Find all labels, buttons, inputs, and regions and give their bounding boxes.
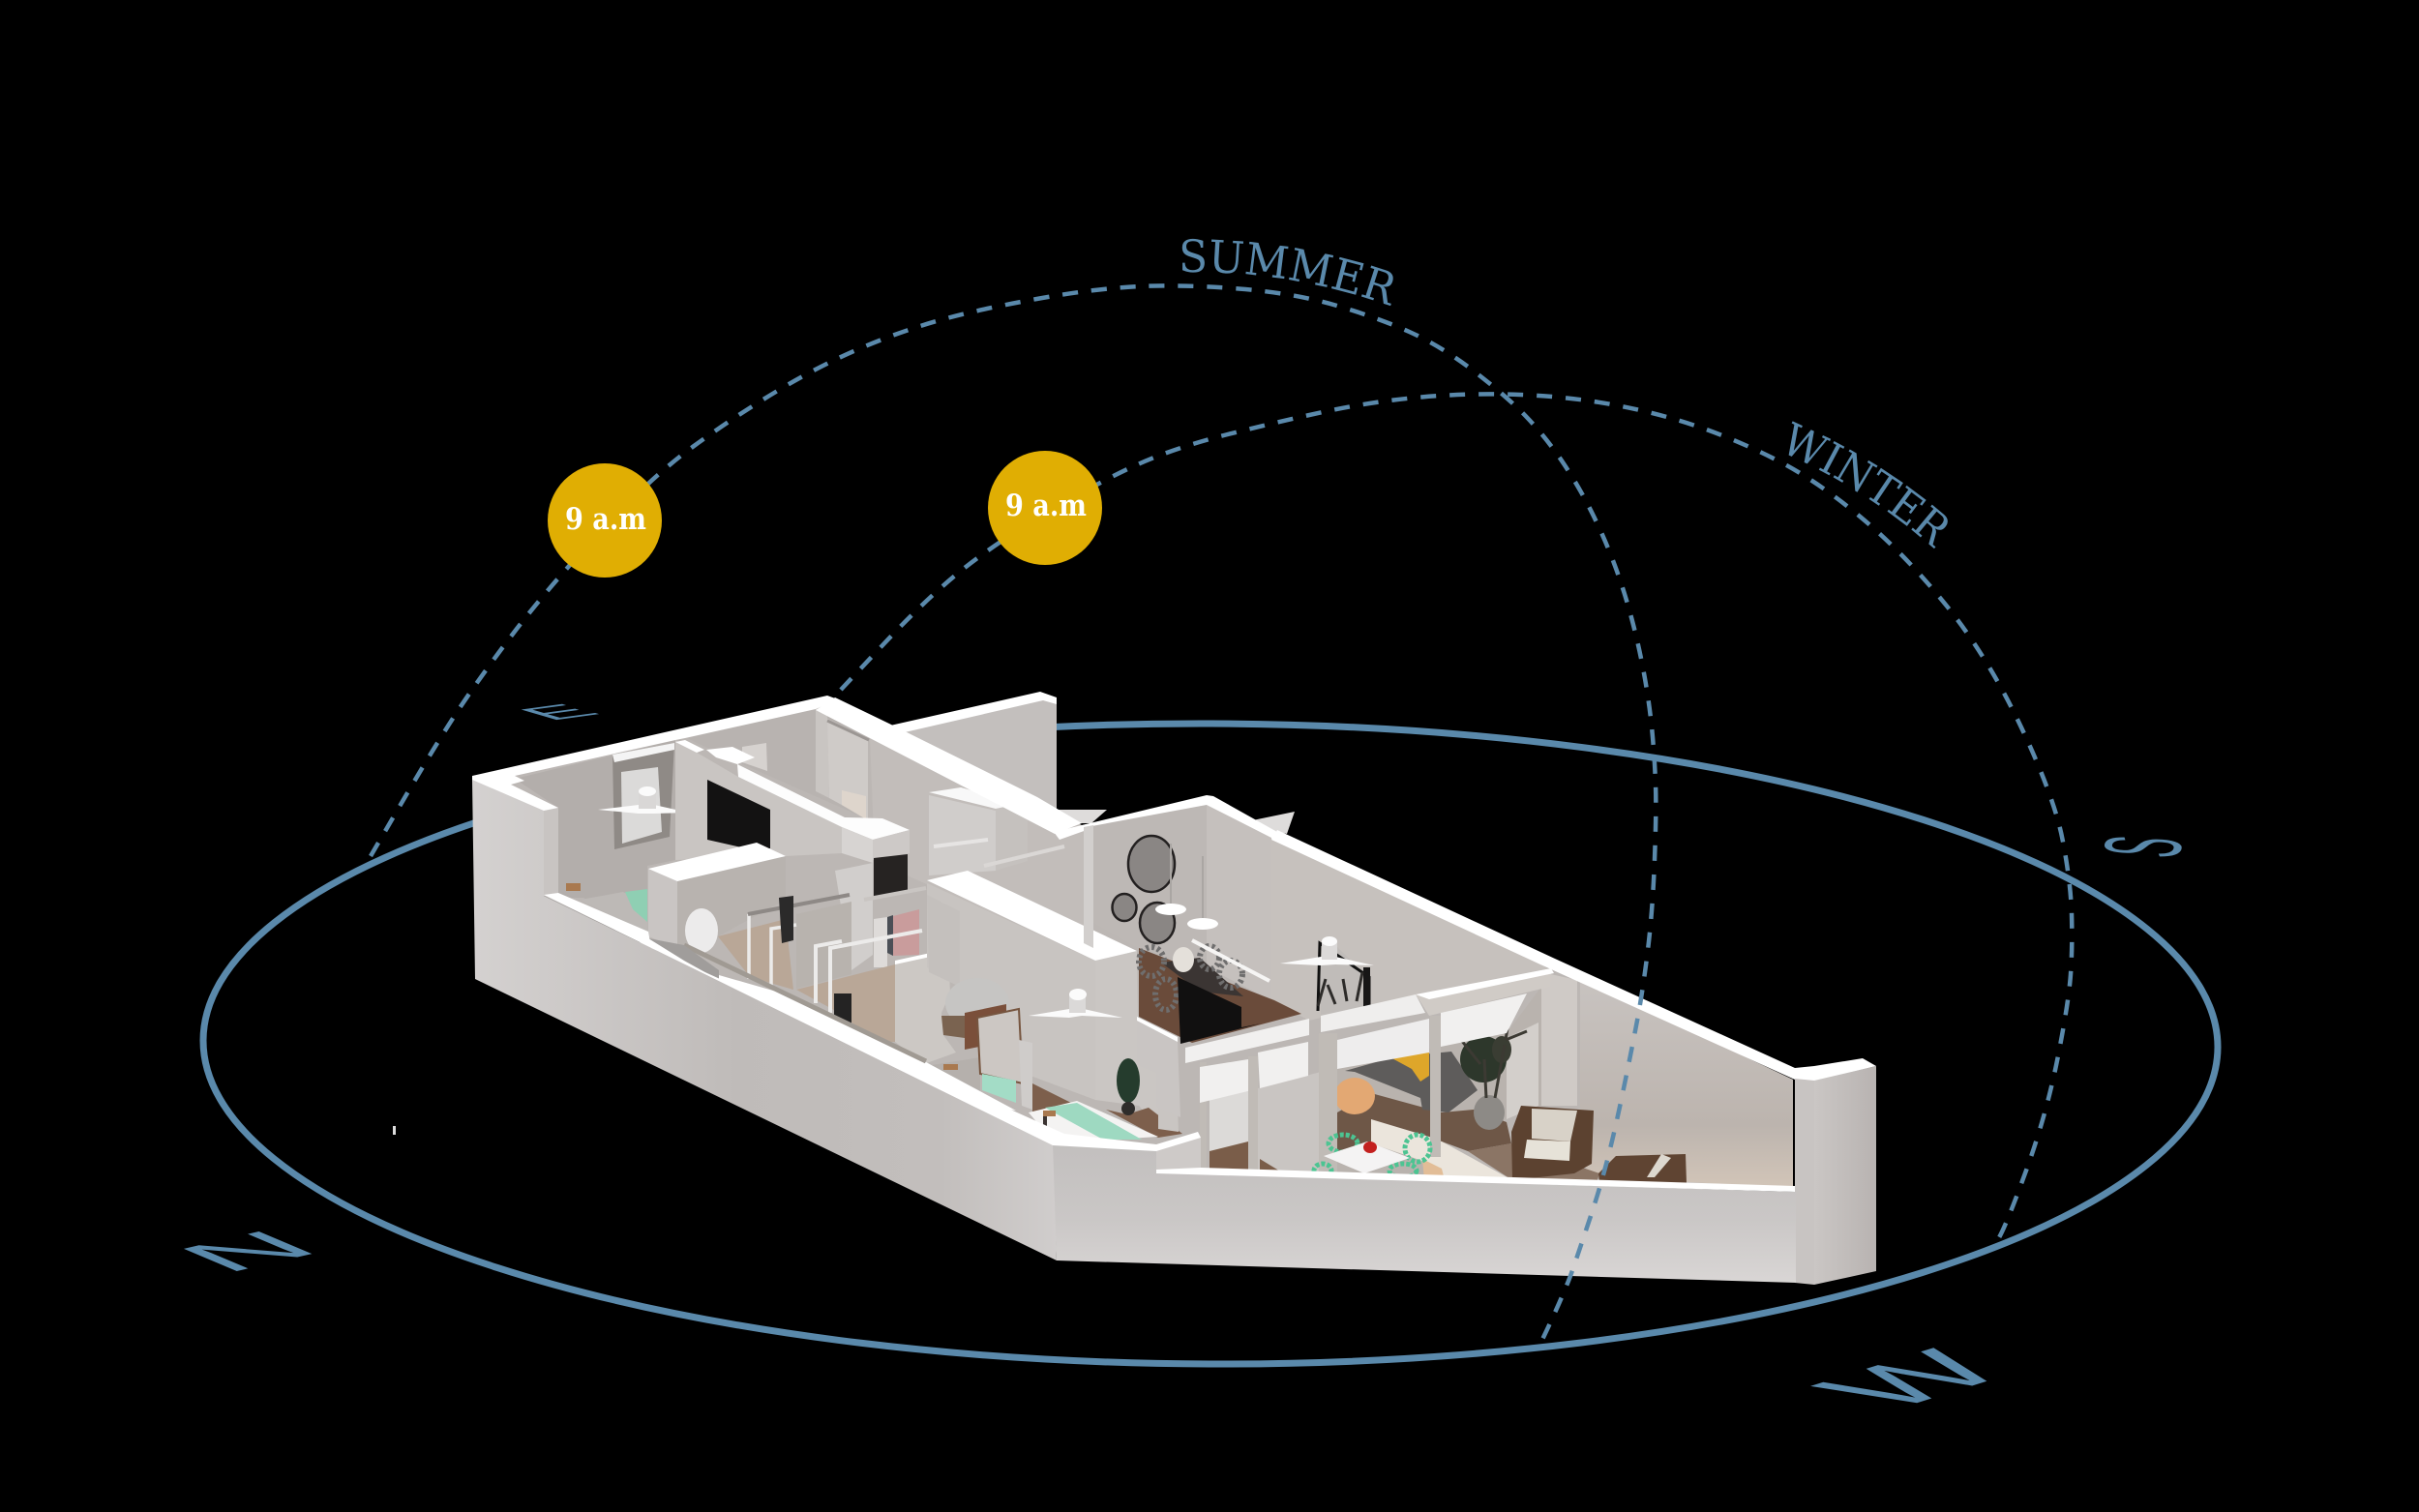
- bedside lamp: [566, 883, 581, 891]
- floor: [1337, 1093, 1511, 1151]
- plant foliage: [1460, 1016, 1527, 1098]
- television: [1178, 977, 1261, 1044]
- sun: winter 9 a.m: 9 a.m: [1005, 489, 1087, 523]
- leaning door: [977, 1009, 1023, 1083]
- left bathroom: [718, 895, 851, 990]
- ceiling fan: [598, 786, 689, 814]
- balcony floor: [1468, 1143, 1599, 1183]
- winter sun path: [841, 394, 2072, 1239]
- window: [612, 743, 674, 849]
- column beside door: [1019, 1040, 1032, 1110]
- speck: [393, 1126, 396, 1135]
- background light slabs: [1058, 810, 1107, 823]
- vases: [1173, 947, 1194, 972]
- label: winter: WINTER: [1788, 421, 1948, 549]
- dining area: [1139, 940, 1301, 1044]
- compass letter N: N: [157, 1222, 340, 1281]
- room: left bedroom: [515, 740, 689, 934]
- floor lamp and fan: [1280, 936, 1374, 1016]
- pendant lamps: [1155, 844, 1218, 930]
- round mirrors: [1113, 836, 1175, 943]
- sofa: [1345, 1052, 1478, 1112]
- towel: [834, 993, 851, 1023]
- outdoor table with mint chairs: [1314, 1135, 1430, 1177]
- brown panel: [965, 1004, 1006, 1050]
- horizon ellipse: [202, 720, 2219, 1368]
- compass letter S: S: [2080, 833, 2207, 861]
- ceiling fan: [1280, 936, 1374, 965]
- door blind: [827, 719, 868, 819]
- back wall white tops: [472, 696, 1277, 840]
- TV partition wall: [675, 740, 910, 860]
- living room seen through doors: [1334, 987, 1599, 1185]
- white strip behind glass rail: [639, 938, 1016, 1111]
- pane: [895, 951, 956, 1064]
- wardrobe block: [648, 843, 786, 953]
- round mirror: [945, 978, 1009, 1028]
- room: back bedroom: [687, 709, 869, 819]
- wall top band: [737, 764, 910, 840]
- low wall: [926, 1057, 980, 1091]
- right end pillar: [1795, 1066, 1876, 1285]
- column: [816, 709, 829, 798]
- ceiling fan: [1029, 989, 1122, 1018]
- round orange table: [1334, 1078, 1375, 1114]
- label: summer: SUMMER: [1182, 238, 1393, 306]
- rail: [1192, 940, 1269, 981]
- armchair small: [1598, 1154, 1687, 1183]
- interior back: [1337, 987, 1541, 1185]
- television: [707, 780, 770, 849]
- right pier: [1541, 972, 1577, 1106]
- sun: summer 9 a.m: [548, 463, 662, 578]
- grey shadow under wardrobe: [648, 938, 719, 980]
- plant: [1117, 1058, 1140, 1115]
- floor: [1032, 1083, 1071, 1112]
- corridor box: [929, 787, 1064, 875]
- plant pot: [1474, 1095, 1505, 1130]
- small box top: [706, 747, 755, 764]
- door frames: [1200, 1016, 1441, 1172]
- sun: summer 9 a.m: 9 a.m: [565, 502, 646, 537]
- door head beam: [1185, 968, 1554, 1103]
- round mirror: [685, 908, 718, 953]
- door outline: [927, 895, 960, 987]
- back window glass: [742, 743, 767, 771]
- table: [1161, 958, 1243, 996]
- armchair large: [1511, 1106, 1594, 1180]
- bedroom 2: [943, 1058, 1182, 1143]
- dividing wall: [1137, 1017, 1180, 1117]
- tan tile: [1422, 1159, 1445, 1180]
- chairs: [1139, 946, 1242, 1010]
- lower white closet: [874, 917, 887, 967]
- right bathroom: [796, 931, 990, 1064]
- sun: winter 9 a.m: [988, 451, 1102, 565]
- far back wall: [890, 692, 1057, 811]
- cabinet: [1158, 1074, 1179, 1132]
- closet column: [835, 827, 926, 970]
- cushions: [1389, 1052, 1429, 1082]
- corridor wall: [870, 737, 1089, 967]
- wall behind plant: [1507, 1023, 1538, 1119]
- summer sun path: [371, 285, 1656, 1346]
- compass letter E: E: [504, 700, 613, 724]
- shower fittings: [816, 931, 922, 1013]
- pillow: [625, 889, 647, 922]
- towel rails: [945, 945, 990, 963]
- black towel: [779, 896, 793, 943]
- blinds: [1337, 1019, 1429, 1069]
- shower fittings: [749, 914, 796, 987]
- interior base: [472, 697, 1793, 1188]
- glass rail: [684, 945, 926, 1061]
- bed: [1029, 1101, 1158, 1143]
- bedside lamp: [1043, 1111, 1056, 1116]
- balcony back wall: [1580, 979, 1793, 1188]
- front wall tops: [544, 893, 1201, 1151]
- sliding door interior left: [1200, 972, 1577, 1172]
- long front wall: [472, 780, 1057, 1260]
- bed: [581, 892, 647, 934]
- white rug: [1371, 1119, 1512, 1180]
- hanging clothes: [893, 909, 919, 956]
- apartment model: [472, 692, 1876, 1285]
- dark reflection: [941, 1016, 965, 1038]
- low balcony wall: [1051, 1137, 1796, 1283]
- long living wall: [1271, 839, 1549, 1021]
- left wall jamb: [544, 808, 558, 898]
- living back wall: [1084, 805, 1271, 1000]
- palm leaf tips: [1318, 972, 1362, 1006]
- central wardrobe: [926, 871, 1178, 1128]
- long wall top: [1271, 830, 1876, 1082]
- compass letter W: W: [1785, 1340, 2039, 1419]
- pillow: [982, 1074, 1016, 1103]
